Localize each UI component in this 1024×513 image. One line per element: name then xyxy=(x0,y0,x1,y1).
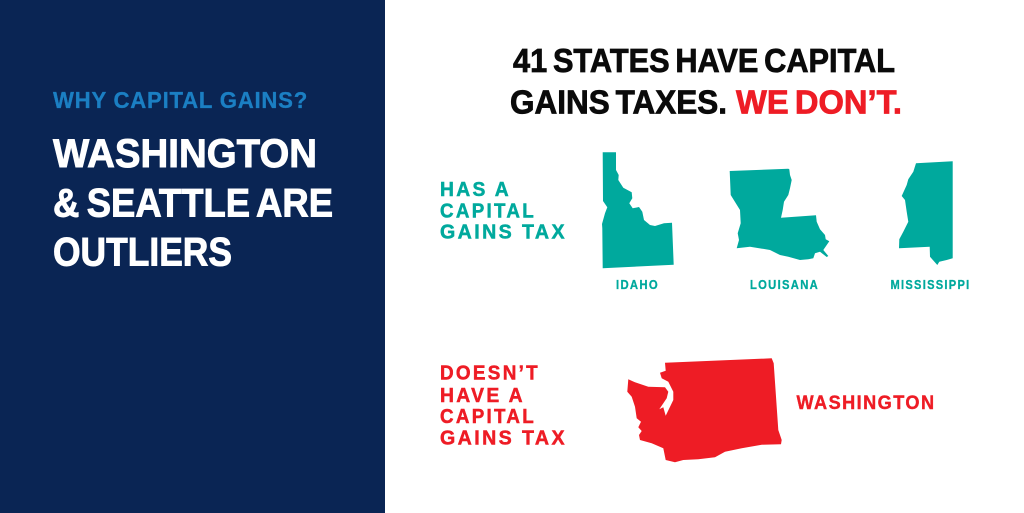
title xyxy=(510,43,902,122)
label: has a capital gains tax: HAS A xyxy=(440,178,511,201)
label: doesn't have a capital gains tax: DOESN’T xyxy=(440,362,540,384)
icon: Washington state map xyxy=(627,358,782,462)
label: Louisana: LOUISANA xyxy=(750,277,819,292)
sidebar main heading: WASHINGTON xyxy=(53,132,317,176)
label: Washington: WASHINGTON xyxy=(796,393,936,414)
icon: Idaho state map xyxy=(602,152,674,268)
label: Mississippi: MISSISSIPPI xyxy=(890,277,970,292)
label: doesn't have a capital gains tax: CAPITAL xyxy=(440,405,536,428)
label: doesn't have a capital gains tax: GAINS TAX xyxy=(440,426,567,450)
title: WE DON’T. xyxy=(736,84,902,122)
panel: left navy sidebar xyxy=(0,0,385,513)
label: has a capital gains tax: CAPITAL xyxy=(440,200,536,222)
icon: Mississippi state map xyxy=(899,161,953,265)
sidebar main heading xyxy=(53,132,333,274)
icon: Louisiana state map xyxy=(730,169,829,260)
label: doesn't have a capital gains tax xyxy=(440,362,567,450)
sidebar main heading: OUTLIERS xyxy=(53,230,232,274)
sidebar eyebrow heading: WHY CAPITAL GAINS? xyxy=(53,87,308,113)
title: 41 STATES HAVE CAPITAL xyxy=(513,43,895,80)
sidebar main heading: & SEATTLE ARE xyxy=(53,182,333,226)
title: GAINS TAXES. xyxy=(510,84,727,122)
label: has a capital gains tax: GAINS TAX xyxy=(440,220,567,244)
label: Idaho: IDAHO xyxy=(616,277,659,292)
label: doesn't have a capital gains tax: HAVE A xyxy=(440,384,525,407)
label: has a capital gains tax xyxy=(440,178,567,244)
